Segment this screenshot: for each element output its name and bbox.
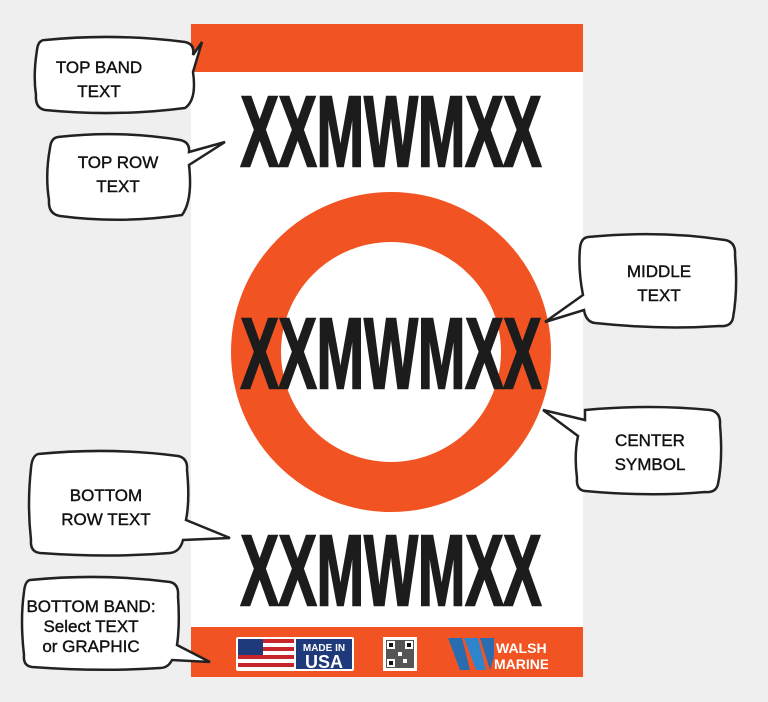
top row text: XXMWMXX bbox=[241, 76, 541, 188]
callout: top band text: TOP BAND bbox=[56, 58, 142, 77]
icon: made in usa bbox=[236, 637, 354, 672]
callout: top band text bbox=[35, 37, 202, 113]
callout: bottom row text: BOTTOM bbox=[70, 486, 142, 505]
callout: bottom band: Select TEXT bbox=[43, 617, 139, 636]
top band bbox=[191, 24, 583, 72]
icon: walsh marine logo: MARINE bbox=[494, 656, 548, 672]
callout: bottom row text bbox=[29, 451, 230, 556]
callout: middle text: TEXT bbox=[637, 286, 681, 305]
icon: walsh marine logo bbox=[448, 638, 548, 672]
callout: top row text: TOP ROW bbox=[78, 153, 158, 172]
callout: top row text bbox=[47, 134, 225, 220]
bottom band bbox=[191, 627, 583, 677]
callout: bottom band: BOTTOM BAND: bbox=[26, 597, 156, 616]
callout: bottom band bbox=[22, 577, 210, 670]
callout: bottom row text: ROW TEXT bbox=[61, 510, 151, 529]
callout: center symbol: CENTER bbox=[615, 431, 685, 450]
middle text: XXMWMXX bbox=[241, 298, 541, 410]
icon: qr code bbox=[383, 637, 417, 671]
sign panel bbox=[191, 24, 583, 677]
icon: walsh marine logo: WALSH bbox=[496, 640, 547, 656]
callout: top row text: TEXT bbox=[96, 177, 140, 196]
bottom row text: XXMWMXX bbox=[241, 515, 541, 627]
bottom band logos bbox=[236, 637, 548, 672]
icon: made in usa: USA bbox=[305, 652, 343, 672]
callout: center symbol: SYMBOL bbox=[615, 455, 685, 474]
callout: middle text: MIDDLE bbox=[627, 262, 691, 281]
callout: middle text bbox=[545, 234, 736, 327]
icon: made in usa: MADE IN bbox=[303, 643, 345, 654]
callout: top band text: TEXT bbox=[77, 82, 121, 101]
callout: center symbol bbox=[543, 407, 721, 494]
callout: bottom band: or GRAPHIC bbox=[42, 637, 140, 656]
